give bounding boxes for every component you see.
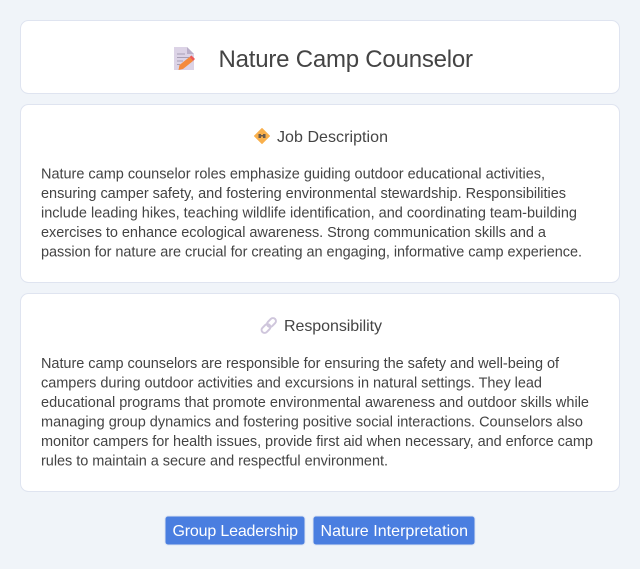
text block: responsibility: managing group dynamics and fostering positive social interactions. Counselors also	[41, 414, 583, 430]
text block: job description: ensuring camper safety, and fostering environmental stewardship. Responsibilities	[41, 186, 566, 202]
tag: nature interpretation: Nature Interpretation	[320, 523, 468, 540]
text block: responsibility: campers during outdoor activities and excursions in natural settings. They lead	[41, 376, 542, 392]
tag: nature interpretation	[313, 516, 475, 545]
tag: group leadership	[165, 516, 305, 545]
text block: job description	[41, 166, 582, 260]
panel: title card	[20, 20, 620, 94]
text block: job description: passion for nature are crucial for creating an engaging, informative camp experience.	[41, 244, 582, 260]
text block: responsibility: rules to maintain a secure and respectful environment.	[41, 454, 388, 470]
text block: responsibility: monitor campers for health issues, provide first aid when necessary, and enforce camp	[41, 434, 593, 450]
heading: responsibility: Responsibility	[284, 318, 382, 335]
text block: responsibility	[41, 356, 593, 470]
tag: group leadership: Group Leadership	[172, 523, 298, 540]
text block: responsibility: Nature camp counselors are responsible for ensuring the safety and well-being of	[41, 356, 560, 372]
icon: document with pencil	[174, 47, 195, 70]
text block: job description: include leading hikes, teaching wildlife identification, and coordinating team-building	[41, 206, 577, 222]
text block: job description: Nature camp counselor roles emphasize guiding outdoor educational activities,	[41, 166, 545, 182]
icon: chain link	[260, 317, 277, 334]
panel: job description	[20, 104, 620, 282]
heading: job description: Job Description	[277, 129, 388, 146]
text block: job description: exercises to enhance ecological awareness. Strong communication skills and a	[41, 225, 547, 241]
title: Nature Camp Counselor	[218, 46, 473, 73]
icon: diamond sign	[254, 128, 270, 144]
panel: responsibility	[20, 294, 620, 492]
text block: responsibility: educational programs that promote environmental awareness and outdoor skills while	[41, 395, 589, 411]
